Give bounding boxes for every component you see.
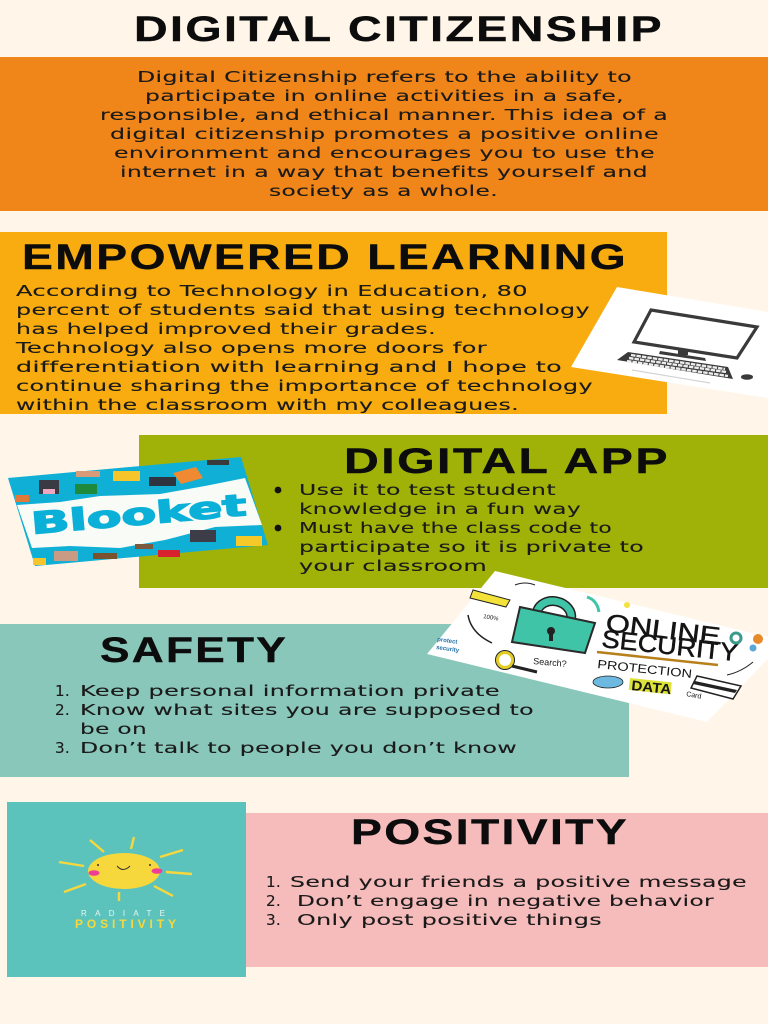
image: online security: protect (437, 637, 458, 646)
intro text: society as a whole. (269, 182, 498, 200)
safety numbered list: be on (80, 720, 147, 738)
intro text (100, 68, 668, 200)
panel: positivity (246, 813, 768, 967)
image: Blooket logo (8, 457, 268, 566)
positivity heading: POSITIVITY (351, 813, 629, 852)
empowered text (14, 282, 593, 414)
intro text: participate in online activities in a safe, (145, 87, 624, 105)
image: online security: Search? (533, 656, 567, 669)
digital app heading: DIGITAL APP (344, 442, 670, 481)
positivity numbered list: 1. (266, 873, 281, 891)
digital app bullet list (275, 481, 644, 575)
panel: introduction (0, 57, 768, 211)
safety numbered list: Know what sites you are supposed to (80, 701, 534, 719)
image: online security (427, 571, 768, 722)
positivity numbered list: Only post positive things (297, 911, 602, 929)
title: DIGITAL CITIZENSHIP (134, 10, 664, 49)
digital app bullet list: your classroom (299, 557, 487, 575)
digital app bullet list: participate so it is private to (299, 538, 644, 556)
intro background (0, 57, 768, 211)
intro text: environment and encourages you to use the (114, 144, 655, 162)
positivity numbered list: Don’t engage in negative behavior (297, 892, 715, 910)
positivity numbered list: Send your friends a positive message (290, 873, 747, 891)
card (691, 676, 741, 699)
intro text: responsible, and ethical manner. This idea of a (100, 106, 668, 124)
empowered text: continue sharing the importance of technology (16, 377, 593, 395)
positivity background (246, 813, 768, 967)
empowered text: within the classroom with my colleagues. (16, 396, 519, 414)
digital app bullet list: knowledge in a fun way (299, 500, 581, 518)
positivity numbered list: 2. (266, 892, 281, 910)
empowered background (0, 232, 667, 414)
radiate text: RADIATE (81, 909, 165, 918)
empowered text: has helped improved their grades. (16, 320, 436, 338)
safety numbered list: Keep personal information private (80, 682, 500, 700)
image: radiate positivity sun (7, 802, 246, 977)
empowered text: According to Technology in Education, 80 (16, 282, 528, 300)
digital app background (139, 435, 768, 588)
image: online security: security (436, 645, 460, 654)
empowered text: percent of students said that using technology (16, 301, 590, 319)
digital app bullet list: Use it to test student (299, 481, 556, 499)
positivity numbered list: 3. (266, 911, 281, 929)
panel: empowered learning (0, 232, 667, 414)
positivity text: POSITIVITY (75, 917, 176, 931)
online security wordmark (600, 609, 740, 667)
icon: desktop computer (571, 287, 768, 400)
safety numbered list: 2. (55, 701, 70, 719)
positivity numbered list (266, 873, 747, 929)
Blooket wordmark: Blooket (30, 488, 248, 542)
panel: digital app (139, 435, 768, 588)
image: online security: 100% (483, 614, 499, 623)
sun rays (59, 837, 192, 901)
digital app bullet list: Must have the class code to (299, 519, 612, 537)
safety numbered list: 1. (55, 682, 70, 700)
image: online security: Card (686, 691, 702, 701)
safety heading: SAFETY (100, 631, 288, 670)
empowered text: differentiation with learning and I hope to (16, 358, 562, 376)
safety numbered list: 3. (55, 739, 70, 757)
image: online security: PROTECTION (597, 657, 693, 681)
padlock (512, 601, 595, 653)
sun face (88, 853, 162, 889)
empowered text: Technology also opens more doors for (14, 339, 488, 357)
magnifying glass (496, 650, 537, 672)
image: online security: DATA (631, 677, 672, 697)
safety numbered list (55, 682, 534, 757)
intro text: digital citizenship promotes a positive online (110, 125, 659, 143)
intro text: Digital Citizenship refers to the ability to (137, 68, 632, 86)
cloud (593, 676, 623, 688)
panel: safety (0, 624, 629, 777)
gears (731, 633, 763, 652)
safety background (0, 624, 629, 777)
data label (629, 678, 672, 694)
intro text: internet in a way that benefits yourself and (120, 163, 648, 181)
safety numbered list: Don’t talk to people you don’t know (80, 739, 517, 757)
online security wordmark: SECURITY (600, 625, 740, 667)
empowered heading: EMPOWERED LEARNING (22, 238, 628, 277)
online security wordmark: ONLINE (604, 609, 722, 651)
